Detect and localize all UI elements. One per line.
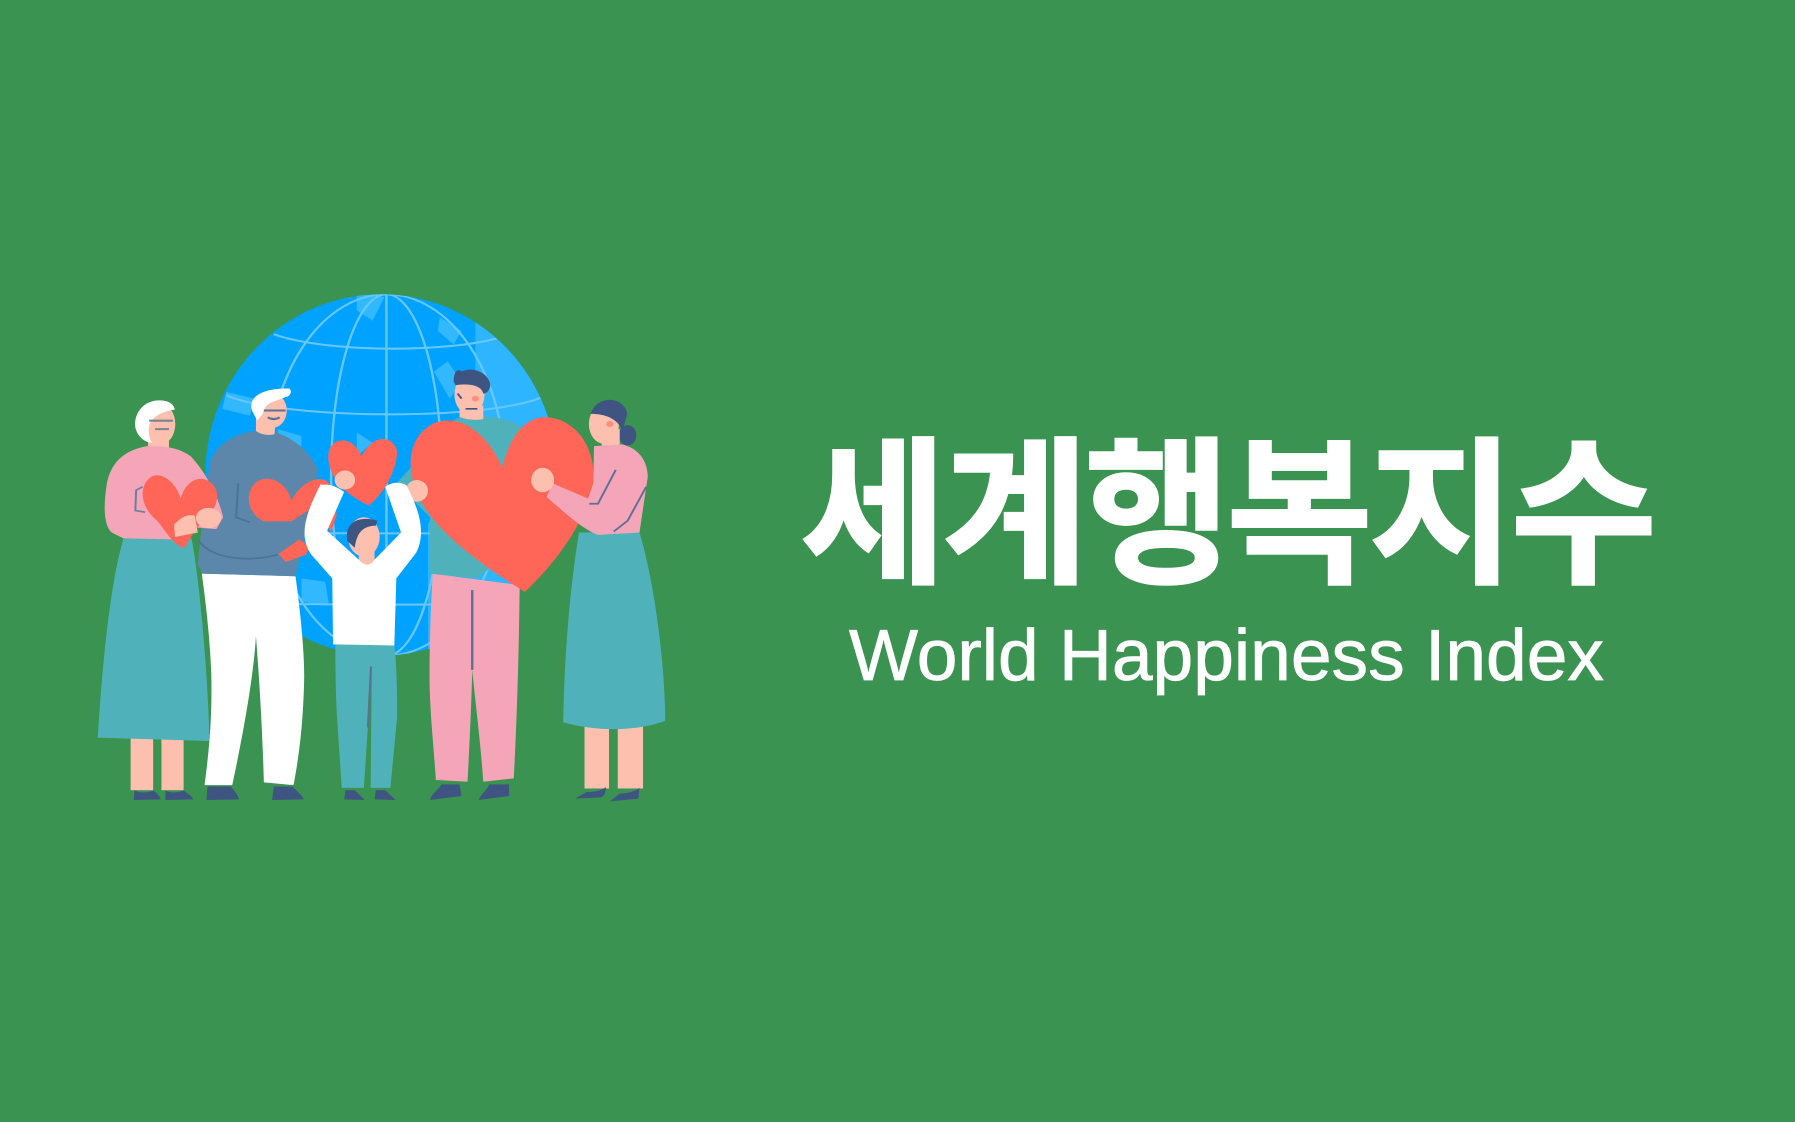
figure: grandfather [198,388,337,800]
figure: mother [531,400,665,801]
title: 세계행복지수 [800,426,1653,604]
icon: held heart [249,479,337,562]
icon: globe [205,290,570,656]
icon: raised heart [328,439,397,505]
subtitle: World Happiness Index [849,616,1604,696]
illustration: family holding hearts in front of globe [98,290,665,801]
icon: big heart [411,417,593,592]
icon: small heart [143,475,217,548]
figure: grandmother [98,400,223,800]
figure: father [396,370,593,800]
figure: child [305,439,421,800]
